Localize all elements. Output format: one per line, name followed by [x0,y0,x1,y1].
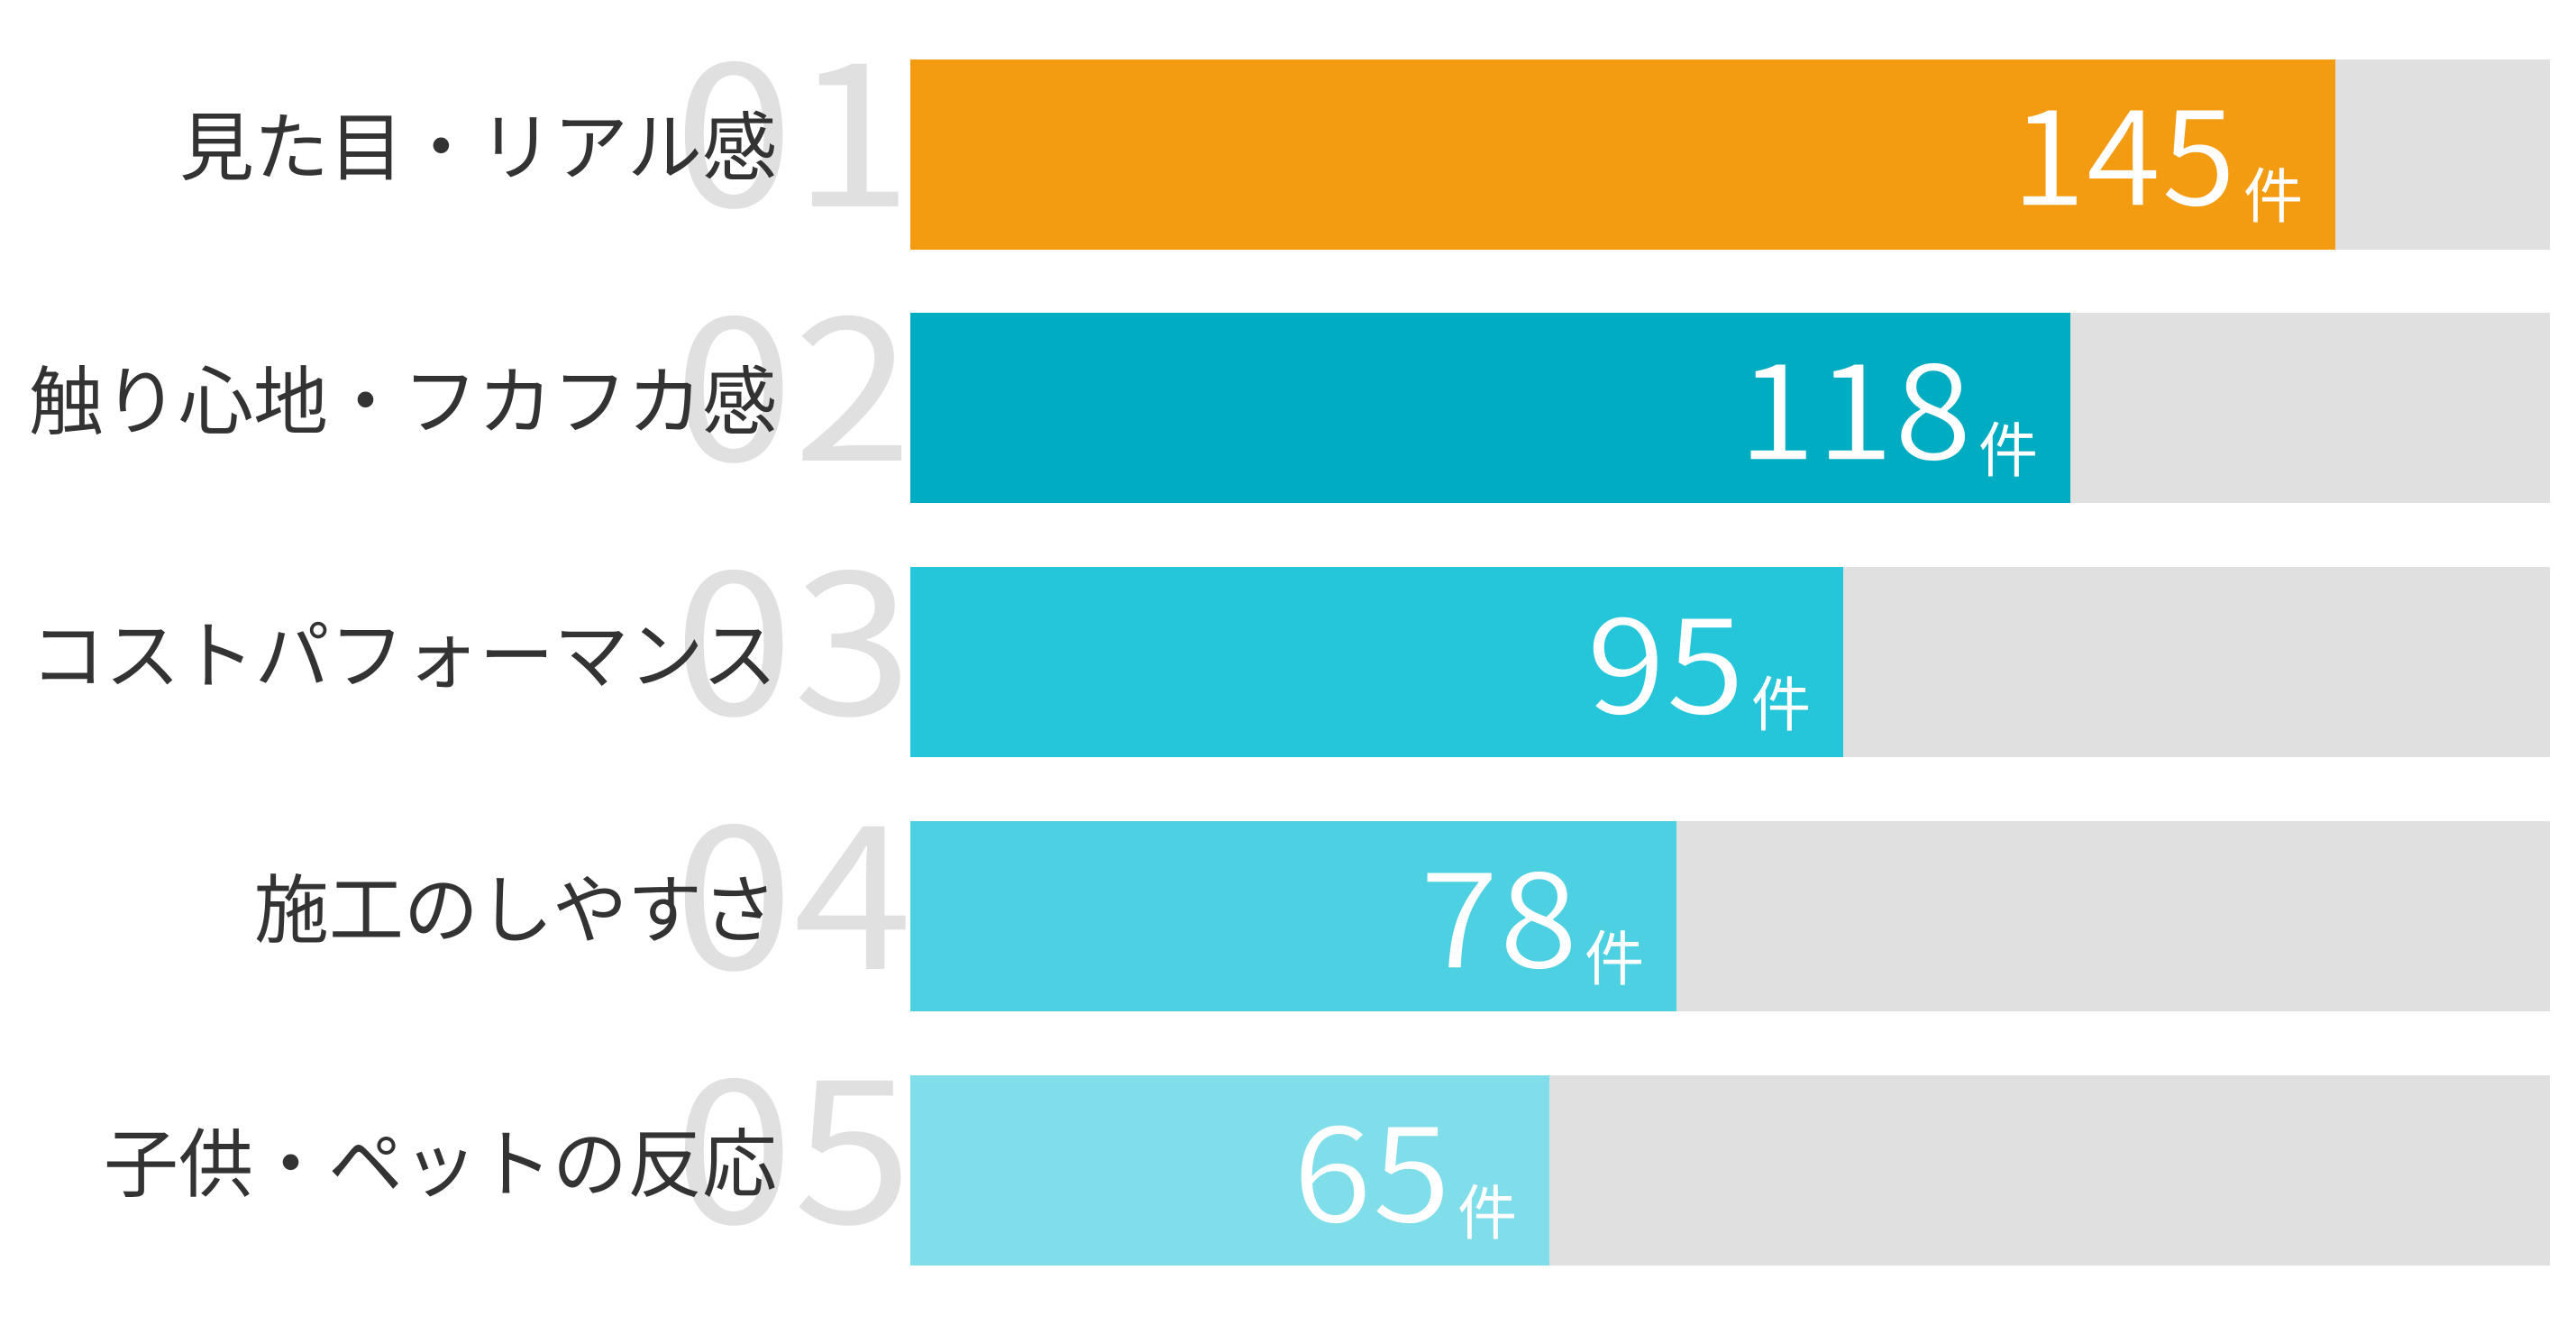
row 4: 施工のしやすさ [254,744,2550,1026]
unit: 件 [1978,417,2038,484]
rank number 04: 04 [674,744,912,1026]
track [910,1075,2550,1266]
row 3: コストパフォーマンス [31,489,2550,772]
rank number 02: 02 [674,235,912,517]
value: 145 [2011,54,2236,243]
row 2: 触り心地・フカフカ感 [29,235,2550,517]
track [910,567,2550,757]
label: 見た目・リアル感 [179,106,777,190]
unit: 件 [1751,672,1811,738]
value: 65 [1293,1071,1451,1260]
label: 施工のしやすさ [254,869,777,953]
unit: 件 [1457,1180,1517,1247]
row 5: 子供・ペットの反応 [104,998,2550,1280]
unit: 件 [2243,163,2303,230]
track [910,821,2550,1011]
bar 145 [910,59,2335,250]
bar 78 [910,821,1676,1011]
track [910,313,2550,503]
value: 118 [1738,308,1972,498]
rank number 05: 05 [674,998,912,1280]
bar 95 [910,567,1843,757]
track [910,59,2550,250]
label: コストパフォーマンス [31,615,777,699]
bar 118 [910,313,2070,503]
rank number 03: 03 [674,489,912,772]
unit: 件 [1585,926,1644,992]
value: 78 [1420,817,1578,1006]
label: 触り心地・フカフカ感 [29,361,777,444]
bar 65 [910,1075,1549,1266]
label: 子供・ペットの反応 [104,1123,777,1207]
value: 95 [1586,562,1745,752]
row 1: 見た目・リアル感 [179,0,2550,263]
